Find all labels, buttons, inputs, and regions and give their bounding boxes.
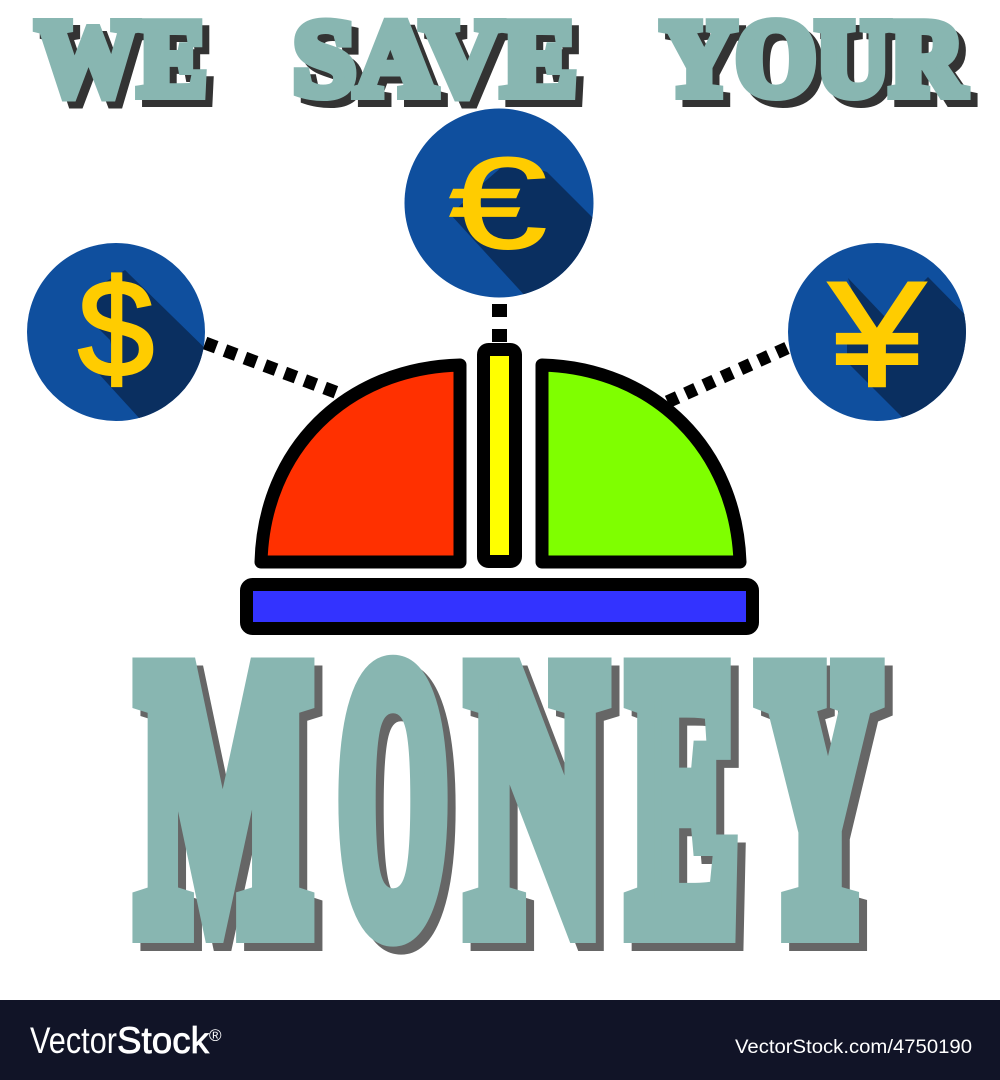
title: we save your: YOUR [668, 6, 972, 126]
title: we save your: SAVE [294, 0, 576, 118]
heading: money: M [147, 598, 318, 1013]
heading: money: O [339, 590, 447, 1005]
footer url: VectorStock.com/4750190 [735, 1037, 972, 1058]
title: we save your [36, 0, 972, 126]
heading: money: O [347, 598, 455, 1013]
heading: money [139, 590, 887, 1013]
heading: money: M [139, 590, 310, 1005]
heading: money: E [630, 590, 737, 1005]
bell left panel [261, 365, 460, 562]
icon: dollar coin [27, 243, 215, 430]
title: we save your: SAVE [300, 6, 584, 126]
heading: money: N [469, 590, 604, 1005]
icon: euro coin [404, 108, 600, 310]
icon: yen coin: ¥ [828, 250, 926, 418]
connector: yen [665, 348, 787, 403]
icon: dollar coin: $ [78, 252, 154, 406]
title: we save your: WE [36, 0, 206, 118]
title: we save your: YOUR [662, 0, 965, 118]
footer brand: Vector [30, 1020, 117, 1061]
heading: money: E [638, 598, 745, 1013]
title: we save your: WE [44, 6, 214, 126]
footer bar [0, 1000, 1000, 1080]
footer brand: Stock [117, 1020, 209, 1061]
connector: dollar [205, 343, 338, 393]
icon: euro coin: € [449, 130, 547, 276]
bell centre bar [484, 350, 516, 562]
heading: money: N [477, 598, 612, 1013]
footer brand [30, 1020, 222, 1061]
bell right panel [542, 365, 740, 562]
connector: euro [492, 304, 507, 342]
illustration: service bell [246, 350, 752, 628]
bell base [246, 584, 752, 628]
footer brand: ® [209, 1026, 222, 1045]
icon: yen coin [788, 243, 966, 421]
